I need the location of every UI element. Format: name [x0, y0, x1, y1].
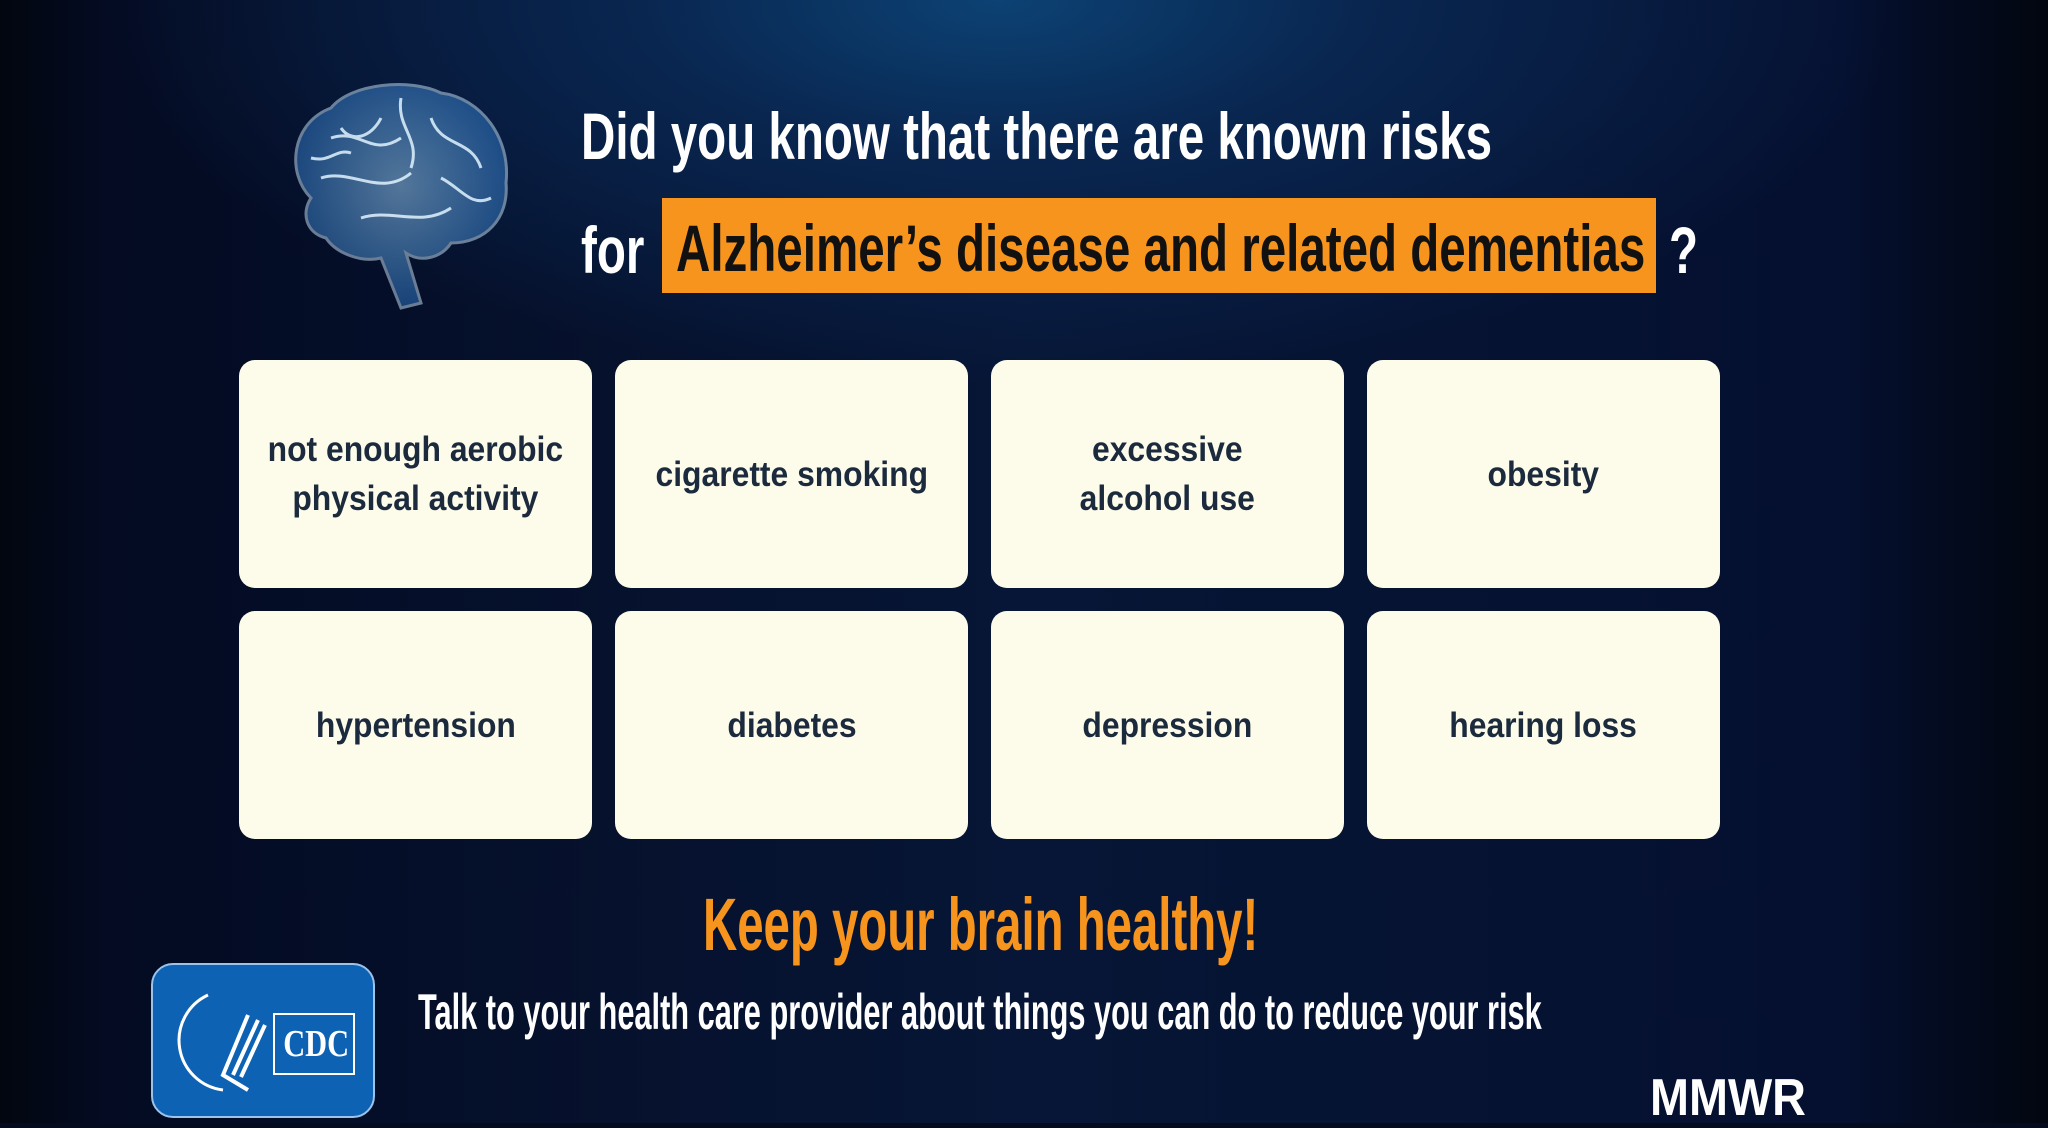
box: obesity — [1367, 360, 1720, 588]
box: aerobic: not enough aerobic — [268, 430, 563, 469]
icon: CDC logo: CDC — [283, 1023, 349, 1065]
box: obesity: obesity — [1488, 454, 1599, 494]
icon: glowing brain — [294, 83, 508, 310]
box: alcohol: excessive — [1092, 430, 1243, 469]
box: alcohol — [991, 360, 1344, 588]
orange highlight: Alzheimer’s disease and related dementias — [676, 211, 1645, 285]
box: diabetes — [615, 611, 968, 839]
box: hearing loss: hearing loss — [1450, 706, 1637, 744]
box: depression: depression — [1083, 706, 1252, 744]
box: alcohol: alcohol use — [1080, 479, 1255, 518]
logo: MMWR: MMWR — [1650, 1069, 1806, 1127]
box: hearing loss — [1367, 611, 1720, 839]
box: aerobic — [239, 360, 592, 588]
box: smoking — [615, 360, 968, 588]
title line 2 with highlight — [581, 198, 1698, 293]
box: hypertension: hypertension — [315, 706, 515, 744]
title line 2 with highlight: ? — [1669, 213, 1698, 287]
box: aerobic: physical activity — [292, 479, 539, 518]
box: smoking: cigarette smoking — [655, 454, 928, 494]
box: hypertension — [239, 611, 592, 839]
box: diabetes: diabetes — [727, 706, 856, 744]
text: talk to provider: Talk to your health care provider about things you can do to reduce your risk — [418, 984, 1542, 1040]
icon: CDC logo — [151, 963, 375, 1118]
title line 2 with highlight: for — [581, 213, 644, 287]
panel: risk factors grid — [239, 360, 1720, 839]
title line 1: Did you know that there are known risks — [581, 99, 1492, 173]
heading: keep your brain healthy: Keep your brain healthy! — [703, 883, 1258, 966]
title — [581, 99, 1698, 293]
box: depression — [991, 611, 1344, 839]
